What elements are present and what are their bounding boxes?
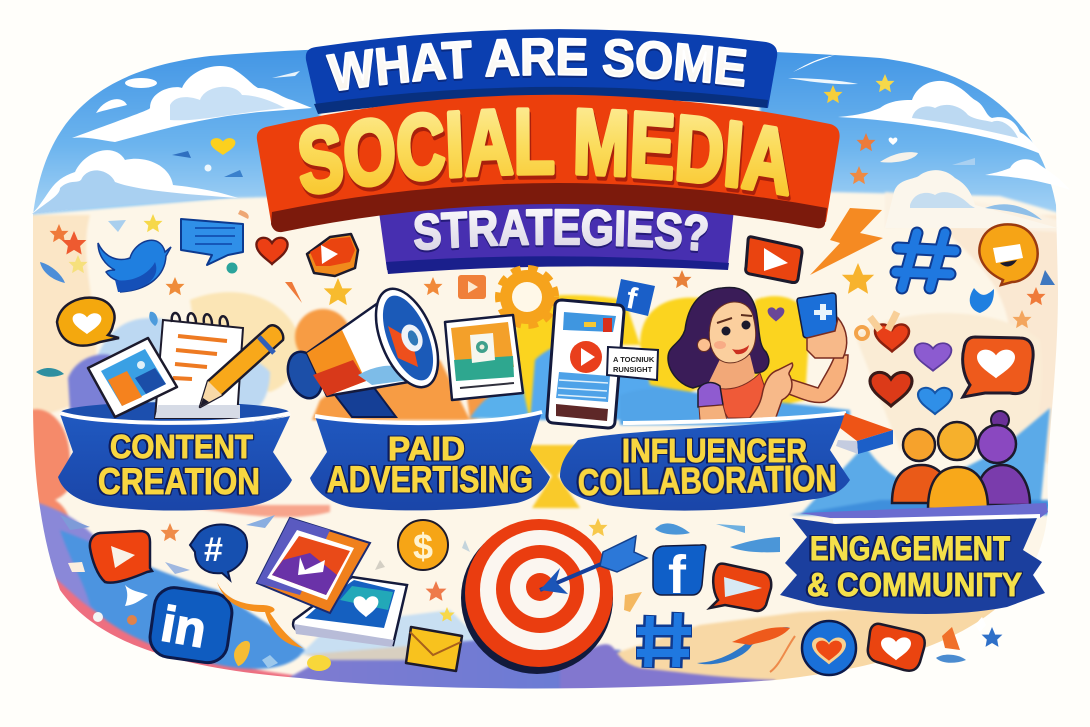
left bottom pink wave	[56, 576, 294, 678]
title line 3: STRATEGIES?	[414, 208, 708, 253]
bottom right peach	[616, 608, 996, 681]
cream patch behind content creation	[190, 292, 300, 392]
megaphone cone	[307, 303, 432, 396]
icon: purple heart small	[768, 307, 784, 322]
raised arm	[782, 355, 848, 403]
icon: facebook tile: f	[624, 282, 641, 316]
icon: red play button	[746, 237, 802, 283]
label: paid: PAID	[388, 430, 465, 467]
ribbon rim	[623, 413, 846, 423]
icon: hexagon play	[307, 234, 358, 276]
ribbon	[310, 412, 550, 510]
ribbon	[780, 518, 1045, 614]
pale sand under sky	[885, 192, 1058, 232]
icon: facebook tile	[615, 279, 655, 316]
icon: lightning	[810, 208, 883, 275]
bottom purple cloud	[560, 642, 776, 688]
panel: content creation	[57, 298, 292, 511]
title banner: orange	[257, 95, 840, 232]
platform	[800, 503, 1048, 518]
icon: orange chat heart	[57, 298, 119, 346]
icon: orange chat with heart	[963, 337, 1033, 397]
right sky clouds	[788, 55, 1070, 228]
icon: small play	[458, 275, 486, 299]
person right	[977, 411, 1030, 505]
pale hearts cloud	[855, 313, 1042, 450]
face	[709, 302, 756, 363]
ear	[698, 338, 710, 352]
icon: tablet with heart	[293, 577, 407, 647]
icon: community people	[892, 411, 1030, 509]
icon: photo frame tilted	[257, 518, 370, 613]
megaphone handle	[335, 385, 396, 417]
person middle	[928, 422, 988, 509]
person left	[892, 429, 950, 503]
left lavender wave	[39, 501, 96, 612]
icon: pencil	[200, 325, 283, 407]
label: collaboration: COLLABORATION	[577, 458, 837, 503]
phone caption card: A TOCNIUK	[613, 355, 655, 364]
orange patch behind megaphone	[293, 307, 349, 352]
icon: blue arrow heart	[970, 288, 994, 313]
icon: phone	[547, 300, 624, 428]
icon: block	[836, 413, 893, 454]
left peach wash	[30, 215, 96, 420]
ribbon rim	[315, 412, 542, 423]
icon: hashtag bubble: #	[204, 531, 223, 569]
icon: hashtag	[896, 233, 955, 288]
icon: hashtag bottom	[636, 612, 692, 668]
icon: tablet	[445, 315, 523, 400]
icon: notepad	[155, 313, 243, 418]
lower arm	[699, 405, 727, 420]
ribbon rim	[833, 516, 1040, 521]
upper cloud	[72, 66, 312, 142]
megaphone back cap	[282, 347, 328, 403]
panel: engagement and community	[780, 503, 1048, 614]
hair	[668, 287, 769, 388]
icon: linkedin: in	[157, 596, 211, 658]
left sky	[20, 40, 320, 215]
right peach wash	[950, 214, 1058, 464]
panel: influencer collaboration	[547, 279, 850, 511]
panel: paid advertising	[282, 270, 554, 510]
icon: gear	[500, 270, 554, 324]
neck	[708, 355, 755, 389]
megaphone bell	[363, 280, 451, 396]
left edge pink blobs	[33, 408, 72, 516]
blue patch behind people	[800, 408, 1050, 515]
arrow	[540, 556, 620, 590]
icon: hearts cluster	[856, 312, 952, 414]
bottom centre wave	[288, 638, 622, 688]
icon: hashtag bubble	[190, 524, 247, 580]
yellow and blue patch behind phone	[515, 295, 640, 420]
scattered confetti	[36, 210, 1055, 671]
title line 2: SOCIAL MEDIA	[299, 107, 791, 201]
ribbon	[560, 413, 850, 511]
icon: megaphone	[282, 280, 451, 417]
left sky clouds	[32, 66, 312, 214]
icon: envelope	[406, 627, 462, 671]
target shadow	[461, 522, 613, 674]
right sky	[758, 52, 1056, 214]
icon: target with arrow	[461, 519, 647, 674]
icon: orange chat circle	[979, 224, 1038, 285]
selfie phone	[797, 293, 837, 338]
icon: dollar coin: $	[413, 526, 433, 567]
icon: linkedin	[147, 585, 234, 665]
icon: orange ribbon	[217, 582, 303, 648]
icon: red heart	[256, 238, 288, 264]
icon: facebook	[653, 545, 706, 605]
ribbon	[58, 414, 292, 511]
icon: red play chat right	[710, 564, 771, 611]
icon: red play chat	[90, 531, 152, 583]
left blue wave	[60, 530, 305, 669]
icon: blue speech bubble	[181, 219, 243, 265]
icon: facebook: f	[668, 545, 687, 605]
label: creation: CREATION	[98, 461, 260, 502]
bowl interior	[60, 402, 290, 424]
phone caption card	[607, 347, 658, 380]
icon: photo frame	[88, 338, 177, 417]
icon: dollar coin	[398, 520, 448, 570]
lower cloud	[32, 150, 238, 214]
icon: twitter bird	[98, 240, 171, 292]
icon: red heart tile	[868, 624, 925, 671]
yellow centre strip between banners	[522, 445, 580, 508]
sleeve	[698, 383, 723, 407]
icon: brush stroke	[697, 627, 795, 672]
pointing hand and forearm	[748, 363, 793, 420]
pale sky strip under ribbons	[300, 610, 480, 655]
phone caption card: RUNSIGHT	[613, 365, 653, 374]
label: content: CONTENT	[110, 428, 253, 465]
title banner: blue	[306, 29, 777, 114]
title line 1: WHAT ARE SOME	[326, 38, 747, 93]
icon: round heart button	[802, 621, 856, 675]
label: community: & COMMUNITY	[807, 566, 1022, 603]
wisps and small shapes	[125, 78, 157, 88]
hand	[807, 318, 847, 358]
bottom centre pale	[306, 645, 407, 662]
label: engagement: ENGAGEMENT	[810, 530, 1010, 568]
illustration: influencer woman	[668, 287, 848, 420]
label: advertising: ADVERTISING	[327, 459, 533, 500]
shirt	[708, 373, 775, 418]
label: influencer: INFLUENCER	[622, 432, 807, 469]
blue patch behind content creation	[97, 316, 272, 406]
title banner: purple	[376, 190, 736, 274]
ribbon rim	[60, 413, 290, 423]
